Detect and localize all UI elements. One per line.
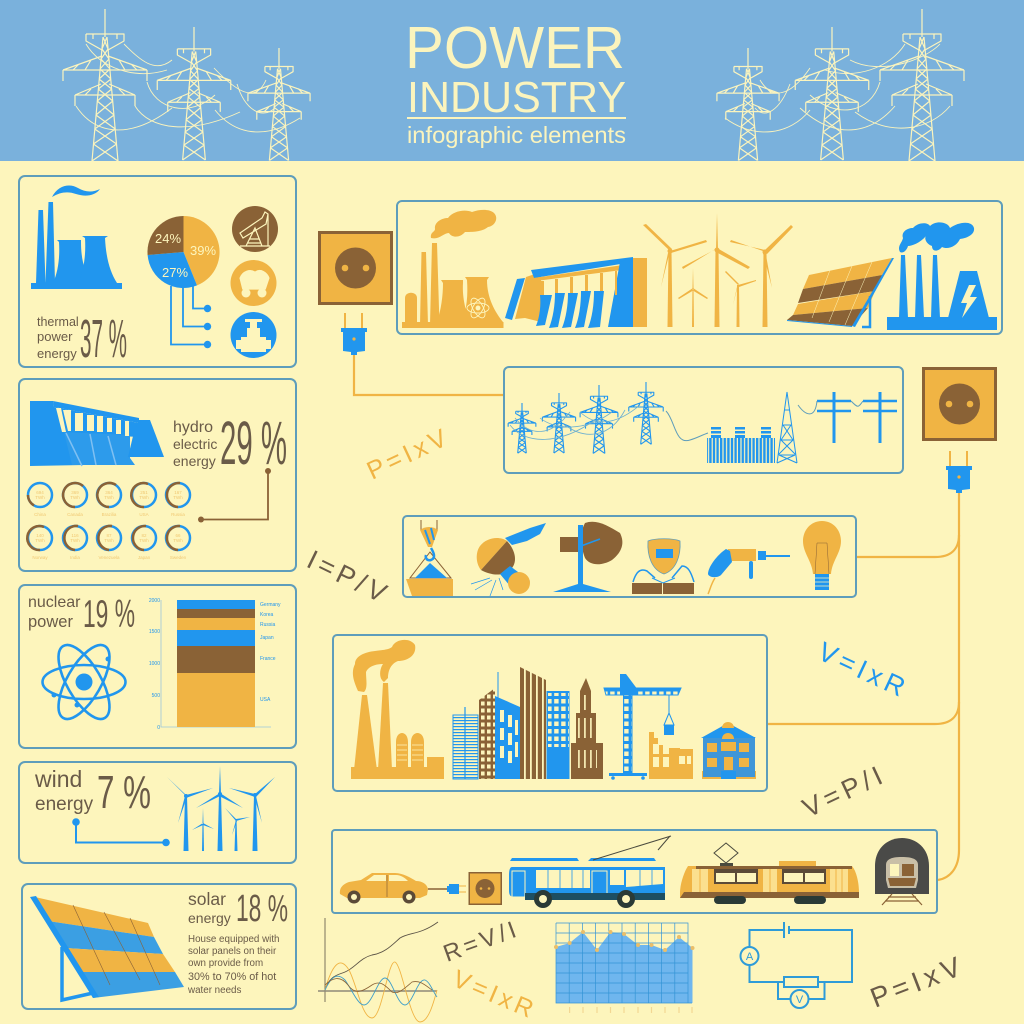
text: solar description: solar panels on their	[188, 946, 277, 957]
icon: oil pump	[232, 206, 278, 252]
pie chart: 24%	[155, 231, 181, 246]
formula: V = I x R gold: V = I x R	[449, 965, 537, 1024]
ring chart values and country labels: TWh	[139, 538, 149, 543]
circuit diagram: V	[796, 994, 804, 1006]
icon: electric car	[340, 873, 447, 904]
icon: wire to substation	[666, 411, 708, 441]
label: wind energy 7 %: 7 %	[97, 766, 151, 818]
formula: V = I x R blue: V = I x R	[813, 636, 910, 702]
icon: factory with smoke	[351, 640, 444, 779]
label: nuclear power 19 %	[28, 593, 135, 636]
icon: wind turbines	[167, 766, 275, 851]
label: hydro electric energy 29 %	[173, 409, 287, 477]
panel: hydro electric energy	[19, 379, 296, 571]
stacked bar chart: USA	[260, 697, 271, 703]
ring chart values and country labels: 369	[71, 490, 79, 495]
icon: socket 1	[318, 231, 393, 305]
line chart with sine waves	[318, 918, 438, 1022]
title: POWER	[405, 15, 625, 81]
pie chart: 39%	[190, 243, 216, 258]
stacked bar chart: Russia	[260, 622, 276, 628]
text: solar description: own provide from	[188, 958, 263, 969]
icon: nuclear plant	[402, 210, 504, 328]
icon: plug and socket	[447, 872, 502, 905]
pie chart: 27%	[162, 265, 188, 280]
stacked bar chart: 1500	[149, 629, 160, 635]
icon: thermal plant	[31, 185, 122, 289]
ring chart values and country labels: USA	[139, 512, 149, 517]
icon: fan press	[553, 522, 622, 592]
label: wind energy 7 %: energy	[35, 794, 94, 815]
text: solar description: water needs	[187, 985, 241, 996]
icon: coal cart	[230, 260, 276, 306]
title	[405, 15, 626, 148]
icon: welder	[632, 539, 694, 594]
stacked bar chart: 500	[152, 693, 160, 699]
label: wind energy 7 %: wind	[34, 766, 82, 792]
connector: hydro	[198, 468, 271, 522]
icon: gold wind turbines	[643, 213, 793, 327]
stacked bar chart: Germany	[260, 602, 281, 608]
label: thermal power energy 37 %: energy	[37, 346, 77, 361]
icon: plug 2	[946, 451, 972, 493]
icon: hydro dam	[30, 401, 164, 466]
ring chart values and country labels: India	[70, 555, 80, 560]
label: hydro electric energy 29 %: energy	[173, 453, 216, 469]
area chart	[554, 923, 694, 1013]
label: solar energy 18 %	[188, 888, 288, 930]
formula: I = P / V: I = P / V	[302, 544, 391, 608]
ring chart values and country labels: TWh	[104, 495, 114, 500]
ring chart values and country labels: 694	[36, 490, 44, 495]
icon: blue factory	[887, 222, 997, 330]
ring chart values and country labels: 364	[105, 490, 113, 495]
label: nuclear power 19 %: 19 %	[83, 593, 135, 636]
ring chart values and country labels: Russia	[171, 512, 185, 517]
ring chart values and country labels: 82	[141, 533, 147, 538]
pie leader lines	[171, 285, 211, 348]
title: INDUSTRY	[407, 73, 626, 122]
text: solar description: 30% to 70% of hot	[188, 971, 276, 983]
ring chart values and country labels: 251	[140, 490, 148, 495]
icon: crane hook	[406, 520, 453, 596]
label: nuclear power 19 %: power	[28, 613, 73, 631]
icon: angle grinder	[471, 523, 546, 596]
icon: tram	[680, 843, 859, 904]
ring chart values and country labels: Japan	[138, 555, 151, 560]
label: hydro electric energy 29 %: hydro	[173, 419, 213, 436]
ring chart values and country labels: Norway	[32, 555, 48, 560]
label: wind energy 7 %	[34, 766, 151, 818]
icon: right power towers	[717, 9, 964, 161]
icon: solar panel	[30, 896, 184, 1000]
ring chart values and country labels: 140	[36, 533, 44, 538]
ring chart values and country labels: Venezuela	[98, 555, 120, 560]
ring chart values and country labels	[32, 490, 187, 560]
icon: left power towers	[63, 9, 310, 161]
stacked bar chart	[149, 598, 281, 731]
ring chart values and country labels: TWh	[104, 538, 114, 543]
circuit diagram: A	[746, 951, 754, 963]
text: solar description	[187, 934, 280, 996]
formula: P = I x V dark: P = I x V	[866, 951, 965, 1014]
label: solar energy 18 %: 18 %	[236, 888, 288, 930]
icon: utility poles	[798, 392, 897, 443]
stacked bar chart: 2000	[149, 598, 160, 604]
panel: nuclear power	[19, 585, 296, 748]
icon: tower crane	[604, 674, 681, 780]
ring chart values and country labels: 167	[174, 490, 182, 495]
panel: thermal power energy: 37 %	[80, 309, 127, 369]
panel: thermal power energy	[19, 176, 296, 369]
stacked bar chart: Korea	[260, 612, 274, 618]
icon: gas valve	[230, 312, 276, 358]
icon: trolleybus	[509, 836, 671, 908]
panel: electric transport	[332, 830, 937, 913]
icon: light bulb	[803, 521, 841, 590]
panel: industrial consumers	[403, 516, 856, 597]
ring chart values and country labels: 116	[71, 533, 79, 538]
panel: city consumers	[333, 635, 767, 791]
icon: dam	[505, 257, 647, 328]
title: infographic elements	[407, 122, 626, 148]
panel: wind energy	[19, 762, 296, 863]
icon: plug 1	[341, 313, 367, 355]
formula: V = P / I: V = P / I	[798, 761, 887, 823]
ring chart values and country labels: Sweden	[170, 555, 187, 560]
ring charts: hydro output by country	[27, 483, 190, 550]
ring chart values and country labels: TWh	[173, 538, 183, 543]
ring chart values and country labels: TWh	[70, 495, 80, 500]
panel: power generation	[397, 201, 1002, 334]
panel: hydro electric energy: 29 %	[220, 409, 287, 477]
stacked bar chart: Japan	[260, 635, 274, 641]
ring chart values and country labels: China	[34, 512, 46, 517]
icon: city skyline	[453, 667, 603, 779]
ring chart values and country labels: TWh	[35, 538, 45, 543]
label: solar energy 18 %: energy	[188, 910, 231, 926]
icon: metro tunnel	[875, 838, 929, 905]
label: nuclear power 19 %: nuclear	[28, 594, 81, 611]
icon: socket 2	[922, 367, 997, 441]
wires	[354, 352, 959, 880]
label: hydro electric energy 29 %: electric	[173, 436, 217, 452]
pie chart	[147, 216, 220, 288]
label: thermal power energy 37 %: power	[37, 329, 73, 344]
stacked bar chart: 0	[157, 725, 160, 731]
circuit diagram	[740, 922, 852, 1008]
connector: wind	[72, 818, 170, 846]
formula: R = V / I: R = V / I	[440, 916, 520, 968]
ring chart values and country labels: Brazilia	[102, 512, 117, 517]
icon: gold solar panel	[787, 258, 894, 327]
formula: P = I x V gold: P = I x V	[363, 424, 451, 485]
stacked bar chart: 1000	[149, 661, 160, 667]
stacked bar chart: France	[260, 656, 276, 662]
icon: lattice mast	[777, 392, 797, 463]
ring chart values and country labels: TWh	[173, 495, 183, 500]
icon: drill	[708, 549, 790, 594]
label: thermal power energy 37 %: thermal	[37, 315, 79, 329]
icon: substation	[707, 427, 775, 463]
ring chart values and country labels: 87	[106, 533, 112, 538]
ring chart values and country labels: TWh	[70, 538, 80, 543]
panel: power transmission	[504, 367, 903, 473]
label: solar energy 18 %: solar	[188, 889, 226, 909]
ring chart values and country labels: 66	[175, 533, 181, 538]
panel: solar energy	[22, 884, 296, 1009]
header band	[0, 0, 1024, 161]
ring chart values and country labels: TWh	[139, 495, 149, 500]
icon: ruined building	[649, 732, 693, 779]
ring chart values and country labels: TWh	[35, 495, 45, 500]
icon: pylons	[508, 382, 663, 453]
label: thermal power energy 37 %	[37, 309, 127, 369]
icon: house	[701, 722, 756, 779]
text: solar description: House equipped with	[188, 934, 280, 945]
icon: atom	[42, 638, 126, 726]
ring chart values and country labels: Canada	[67, 512, 83, 517]
